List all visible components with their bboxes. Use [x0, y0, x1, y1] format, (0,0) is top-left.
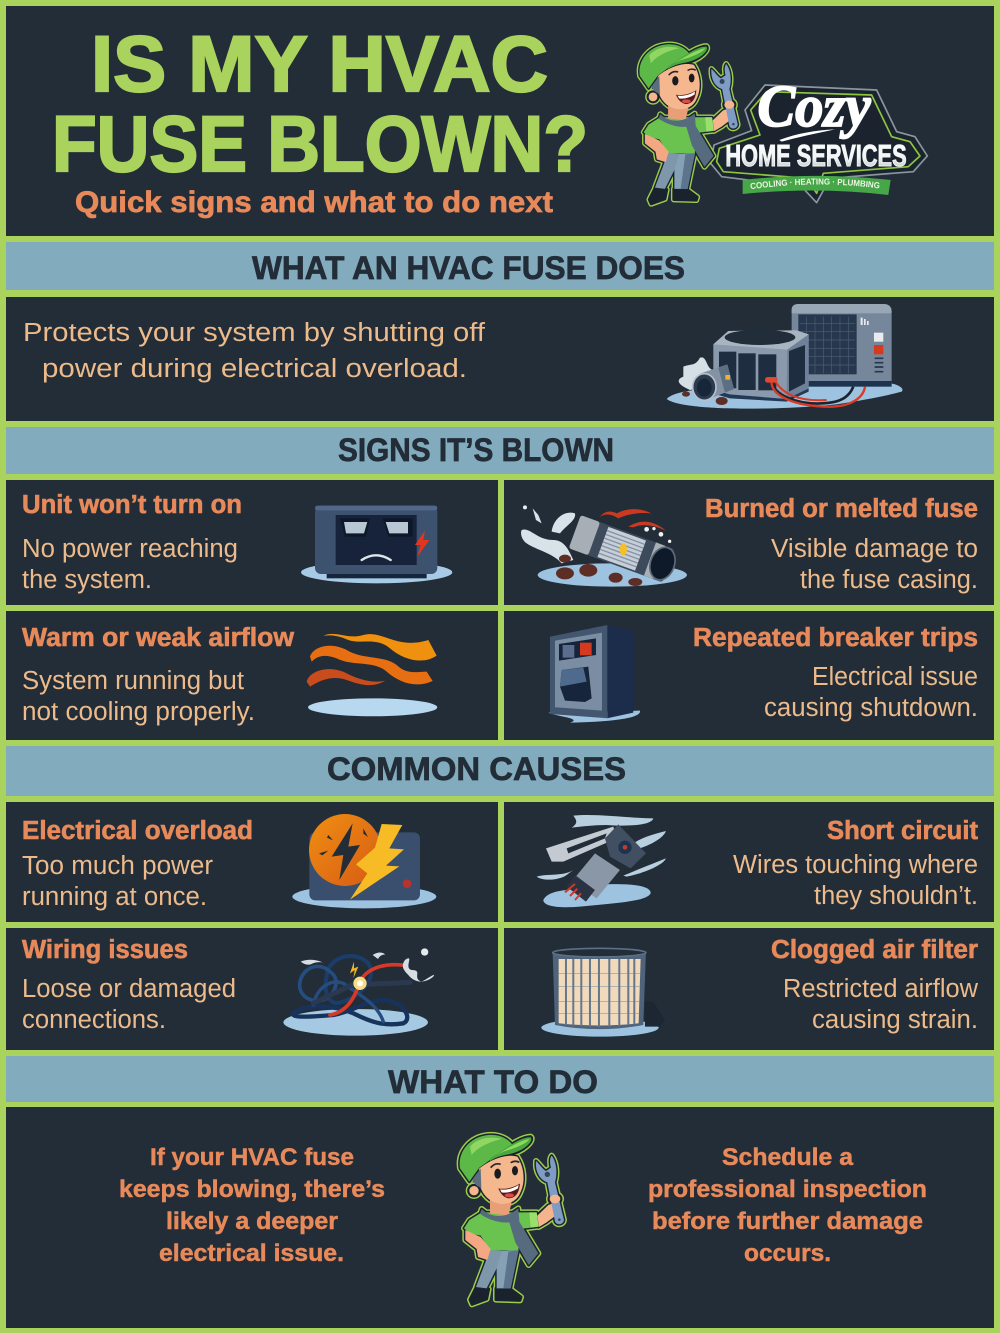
- text: right call to action: [648, 1144, 927, 1267]
- text: burned or melted fuse: [705, 495, 978, 594]
- icon: AC units with fuse: [667, 304, 902, 409]
- text: burned or melted fuse: Visible damage to: [771, 535, 978, 563]
- text: repeated breaker trips: causing shutdown.: [764, 694, 978, 722]
- panel: repeated breaker trips: [504, 611, 994, 740]
- logo: Cozy Home Services: HOME SERVICES: [725, 139, 907, 173]
- icon: burned fuse: [521, 505, 687, 587]
- text: wiring issues: Loose or damaged: [22, 975, 236, 1003]
- panel: clogged air filter: [504, 928, 994, 1050]
- icon: warm air waves: [307, 634, 437, 716]
- text: warm or weak airflow: Warm or weak airflow: [22, 624, 294, 652]
- text: unit won't turn on: [22, 491, 242, 594]
- text: unit won't turn on: Unit won’t turn on: [22, 491, 242, 519]
- text: right call to action: professional inspection: [648, 1176, 927, 1203]
- band: signs it's blown: SIGNS IT’S BLOWN: [338, 432, 614, 468]
- text: burned or melted fuse: the fuse casing.: [800, 566, 978, 594]
- logo: Cozy Home Services: [710, 73, 928, 204]
- icon: mascot with wrench: [640, 44, 738, 204]
- text: electrical overload: Too much power: [22, 852, 214, 880]
- title: FUSE BLOWN?: [52, 99, 588, 188]
- panel: header: [6, 6, 994, 236]
- logo: Cozy Home Services: COOLING · HEATING · PLUMBING: [750, 178, 880, 189]
- text: left call to action: electrical issue.: [159, 1240, 344, 1267]
- icon: tangled wires: [283, 948, 434, 1036]
- text: right call to action: occurs.: [744, 1240, 831, 1267]
- text: clogged air filter: Clogged air filter: [771, 936, 978, 964]
- text: repeated breaker trips: Repeated breaker trips: [693, 624, 978, 652]
- band: what to do: [6, 1056, 994, 1102]
- panel: warm or weak airflow: [6, 611, 498, 740]
- text: wiring issues: connections.: [22, 1006, 166, 1034]
- subtitle: Quick signs and what to do next: [75, 186, 553, 219]
- panel: short circuit: [504, 802, 994, 922]
- title: [52, 19, 588, 188]
- text: fuse description: Protects your system by shutting off: [23, 319, 486, 347]
- text: short circuit: [733, 817, 979, 910]
- band: what to do: WHAT TO DO: [388, 1064, 598, 1100]
- text: left call to action: likely a deeper: [166, 1208, 338, 1235]
- text: clogged air filter: Restricted airflow: [783, 975, 979, 1003]
- icon: short circuit plug: [537, 815, 666, 907]
- band: signs it's blown: [6, 427, 994, 474]
- text: burned or melted fuse: Burned or melted fuse: [705, 495, 978, 523]
- text: warm or weak airflow: [22, 624, 294, 726]
- panel: what to do: [6, 1107, 994, 1328]
- icon: mascot with wrench: [460, 1135, 564, 1304]
- text: repeated breaker trips: [693, 624, 978, 722]
- title: IS MY HVAC: [91, 19, 548, 108]
- icon: sad unit: [301, 506, 452, 583]
- text: fuse description: power during electrical overload.: [42, 355, 467, 383]
- panel: wiring issues: [6, 928, 498, 1050]
- icon: overload surge: [292, 814, 436, 908]
- text: clogged air filter: [771, 936, 979, 1034]
- text: right call to action: before further damage: [652, 1208, 923, 1235]
- text: left call to action: [119, 1144, 385, 1267]
- logo: Cozy Home Services: Cozy: [757, 73, 871, 139]
- band: common causes: COMMON CAUSES: [327, 751, 626, 787]
- text: clogged air filter: causing strain.: [812, 1006, 978, 1034]
- panel: what a fuse does: [6, 297, 994, 421]
- text: short circuit: Short circuit: [827, 817, 979, 845]
- band: what an HVAC fuse does: [6, 242, 994, 290]
- text: fuse description: [23, 319, 486, 383]
- text: wiring issues: [22, 936, 236, 1034]
- text: short circuit: Wires touching where: [733, 851, 978, 879]
- panel: burned or melted fuse: [504, 480, 994, 605]
- text: right call to action: Schedule a: [722, 1144, 853, 1171]
- band: common causes: [6, 746, 994, 796]
- text: repeated breaker trips: Electrical issue: [812, 663, 978, 691]
- panel: electrical overload: [6, 802, 498, 922]
- text: electrical overload: running at once.: [22, 883, 207, 911]
- text: electrical overload: [22, 817, 253, 911]
- text: warm or weak airflow: System running but: [22, 667, 244, 695]
- text: electrical overload: Electrical overload: [22, 817, 253, 845]
- text: short circuit: they shouldn’t.: [814, 882, 978, 910]
- icon: air filter: [541, 948, 665, 1037]
- text: warm or weak airflow: not cooling properly.: [22, 698, 255, 726]
- band: what an HVAC fuse does: WHAT AN HVAC FUSE DOES: [252, 250, 685, 286]
- icon: breaker box: [548, 625, 640, 723]
- text: unit won't turn on: No power reaching: [22, 535, 238, 563]
- text: left call to action: keeps blowing, there’s: [119, 1176, 385, 1203]
- panel: unit won't turn on: [6, 480, 498, 605]
- text: unit won't turn on: the system.: [22, 566, 152, 594]
- text: left call to action: If your HVAC fuse: [150, 1144, 354, 1171]
- text: wiring issues: Wiring issues: [22, 936, 188, 964]
